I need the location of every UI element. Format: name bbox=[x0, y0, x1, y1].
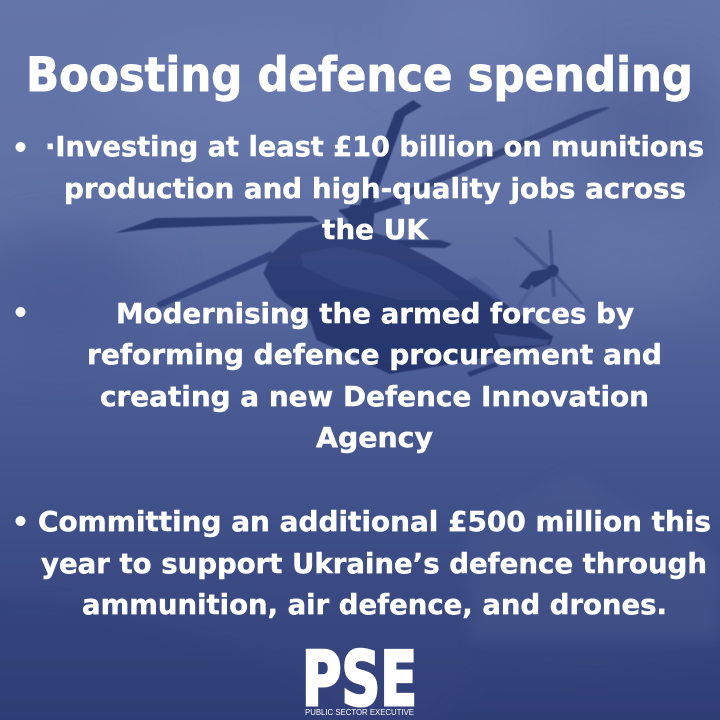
main rotor blades bbox=[115, 100, 610, 308]
bullet marker 3 bbox=[16, 516, 25, 526]
bullet 3: Ukraine: Committing an additional £500 million this bbox=[38, 505, 711, 538]
bullet list bbox=[16, 130, 711, 621]
bullet 1: munitions: production and high-quality jobs across bbox=[64, 172, 686, 205]
bullet 3: Ukraine: year to support Ukraine’s defence through bbox=[41, 547, 707, 580]
bullet 2: modernising: Agency bbox=[316, 421, 433, 454]
fuselage bbox=[263, 220, 553, 377]
bullet 2: modernising: creating a new Defence Innovation bbox=[100, 380, 649, 413]
bullet 1: munitions bbox=[16, 130, 704, 246]
bullet 2: modernising: Modernising the armed forces by bbox=[116, 297, 634, 330]
bullet 3: Ukraine: ammunition, air defence, and drones. bbox=[82, 588, 667, 621]
PSE logo: PUBLIC SECTOR EXECUTIVE bbox=[305, 707, 414, 717]
tail rotor bbox=[513, 230, 583, 308]
bullet 1: munitions: ·Investing at least £10 billion on munitions bbox=[45, 130, 704, 163]
bullet marker 2 bbox=[16, 307, 25, 317]
bullet 1: munitions: the UK bbox=[322, 213, 429, 246]
bullet 3: Ukraine bbox=[16, 505, 711, 621]
helicopter silhouette bbox=[115, 100, 610, 377]
bullet 2: modernising bbox=[16, 297, 662, 454]
bullet 2: modernising: reforming defence procurement and bbox=[87, 338, 662, 371]
bullet marker 1 bbox=[16, 142, 25, 152]
